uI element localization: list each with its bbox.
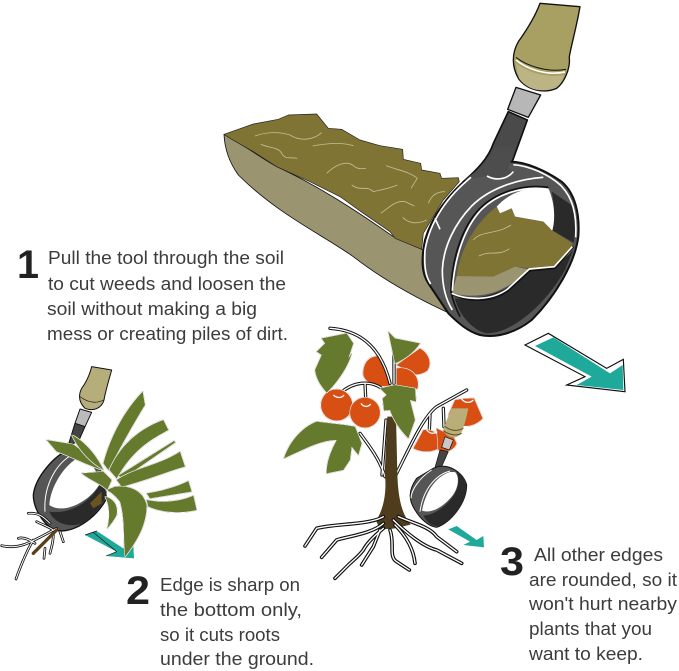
tomatoes front <box>321 389 483 452</box>
step 2 text <box>126 569 314 669</box>
step 2 description: Edge is sharp on <box>160 574 300 595</box>
plant roots <box>305 517 462 578</box>
step 3 text <box>500 540 678 664</box>
tomatoes behind <box>363 348 430 389</box>
main illustration: tool cutting soil <box>224 3 625 392</box>
leaves <box>284 332 420 473</box>
illustration: small tool cutting weed <box>2 367 197 579</box>
illustration: tomato plant with small tool <box>284 328 484 578</box>
step 1 description <box>47 247 288 344</box>
step 1 description: soil without making a big <box>47 298 257 319</box>
step 1 description: to cut weeds and loosen the <box>48 273 286 294</box>
step 3 description: plants that you <box>529 618 652 639</box>
plant <box>284 328 483 578</box>
tool shaft and handle <box>463 3 580 182</box>
weed roots <box>2 513 63 579</box>
small tool <box>410 408 468 527</box>
main stem <box>376 417 411 529</box>
step 2 description <box>160 574 314 669</box>
step 1 description: mess or creating piles of dirt. <box>47 323 288 344</box>
step 3 description: won't hurt nearby <box>528 593 678 614</box>
step 3 description: are rounded, so it <box>529 569 677 590</box>
weed leaves <box>47 392 197 557</box>
step 1 description: Pull the tool through the soil <box>48 247 284 268</box>
number 3: 3 <box>500 540 524 584</box>
small arrow <box>448 526 484 547</box>
number 1: 1 <box>17 243 39 287</box>
step 3 description <box>528 544 678 664</box>
soil strip <box>224 114 463 315</box>
step 1 text <box>17 243 288 344</box>
small arrow <box>85 531 134 558</box>
arrow <box>525 333 625 392</box>
tomato stem caps <box>333 395 473 433</box>
small tool <box>33 367 112 531</box>
step 2 description: under the ground. <box>160 648 314 669</box>
branches <box>330 328 467 477</box>
step 3 description: want to keep. <box>528 643 643 664</box>
step 3 description: All other edges <box>534 544 663 565</box>
step 2 description: so it cuts roots <box>160 624 280 645</box>
ring blade <box>423 147 579 336</box>
number 2: 2 <box>126 569 150 613</box>
step 2 description: the bottom only, <box>160 599 302 620</box>
